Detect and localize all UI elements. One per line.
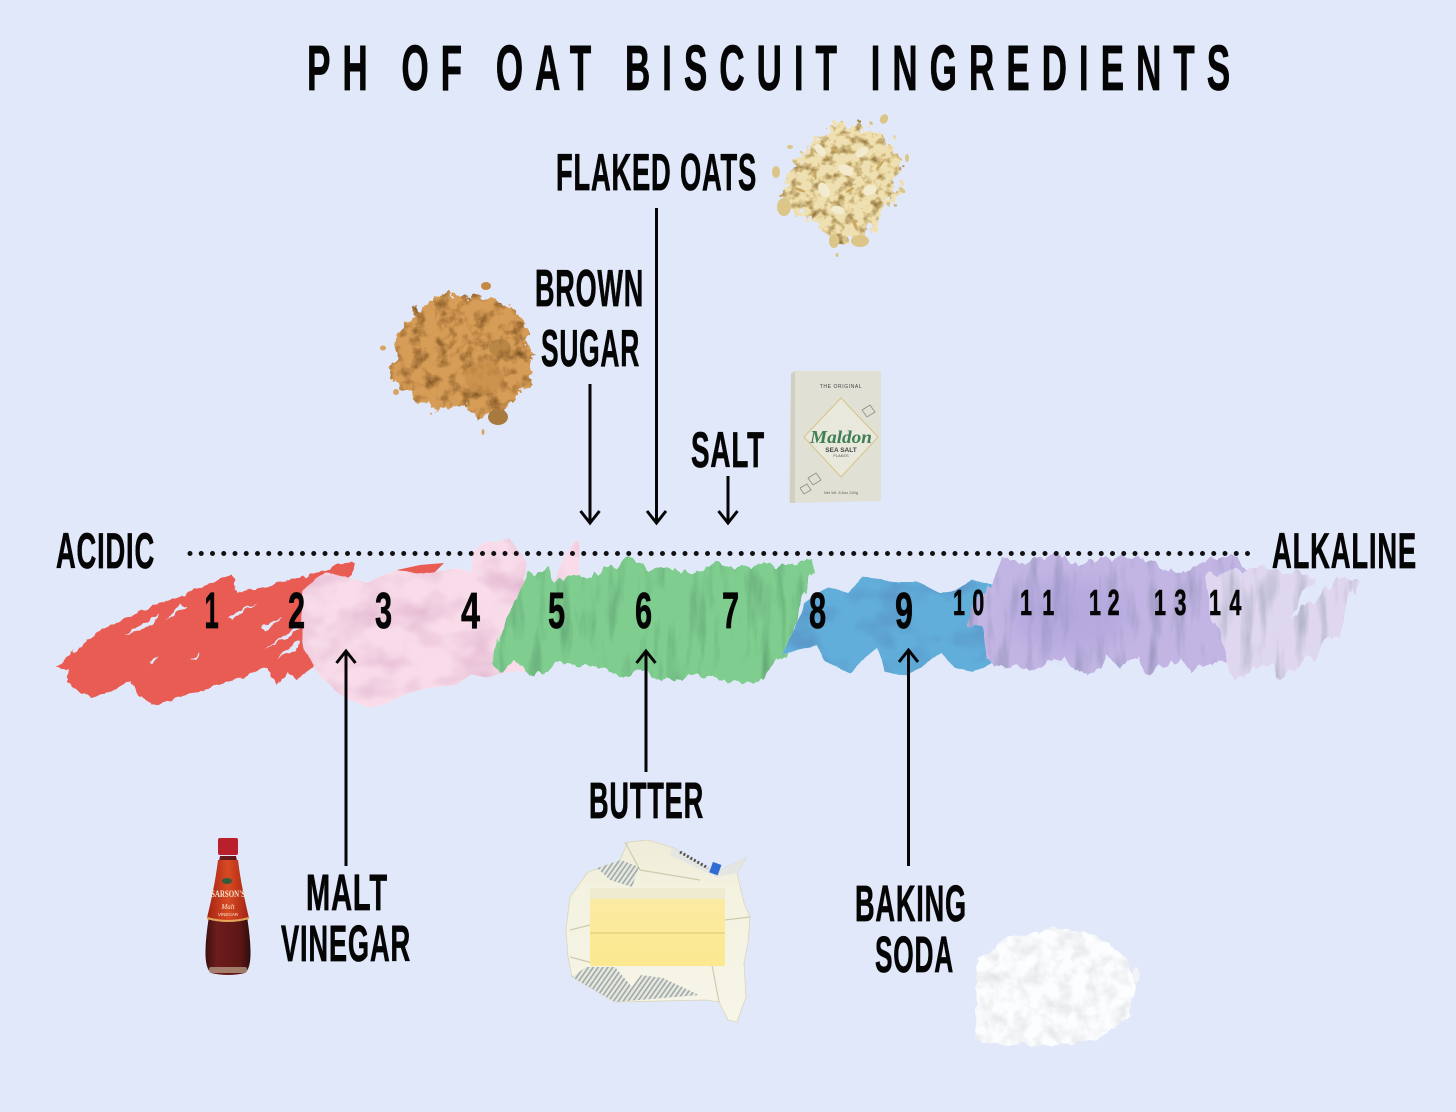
wrapper — [566, 840, 750, 1022]
icon: malt vinegar bottle — [205, 838, 251, 975]
scale numbers 1 to 9: 7 — [722, 582, 740, 639]
scale numbers 1 to 9: 9 — [895, 582, 914, 639]
scale numbers 1 to 9: 2 — [288, 582, 306, 639]
icon: brown sugar pile — [380, 282, 534, 435]
icon: maldon sea salt box — [789, 371, 881, 503]
butter block — [590, 899, 725, 966]
scale numbers 10 to 14: 14 — [1209, 583, 1242, 623]
icon: maldon sea salt box: FLAKES — [833, 453, 849, 458]
scale numbers 1 to 9: 5 — [548, 582, 566, 639]
red stroke: small fragment — [397, 563, 444, 588]
label: malt vinegar — [281, 864, 411, 972]
icon: butter on wrapper — [566, 840, 750, 1022]
arrow: flaked oats to pH 6 — [647, 208, 666, 523]
scale numbers 10 to 14: 10 — [953, 583, 984, 623]
label: acidic: ACIDIC — [56, 523, 155, 579]
arrow: malt vinegar to pH 3 — [336, 651, 356, 866]
icon: maldon sea salt box: SEA SALT — [825, 447, 857, 454]
scale numbers 10 to 14: 13 — [1154, 583, 1186, 623]
arrow: butter to pH 6 — [636, 651, 656, 772]
wrapper crease lines — [570, 842, 750, 1002]
icon: flaked oats pile — [772, 113, 909, 257]
wrapper print strip — [670, 848, 746, 877]
scale numbers 1 to 9: 3 — [375, 582, 393, 639]
wrapper striped fold bottom — [572, 967, 699, 1002]
label: baking soda: BAKING — [855, 875, 967, 932]
pink stroke: acidic — [299, 540, 580, 708]
label: salt: SALT — [691, 422, 765, 478]
label: baking soda: SODA — [875, 926, 954, 983]
pale purple stroke end — [1206, 568, 1358, 685]
label: butter: BUTTER — [589, 772, 704, 829]
scale numbers 1 to 9: 8 — [809, 582, 827, 639]
scale numbers 1 to 9 — [204, 582, 914, 639]
icon: malt vinegar bottle: SARSON'S — [211, 889, 245, 899]
label: brown sugar — [535, 260, 644, 378]
label: malt vinegar: MALT — [306, 864, 388, 921]
scale numbers 1 to 9: 1 — [204, 582, 220, 639]
purple stroke darker wash — [1010, 579, 1130, 651]
arrow: brown sugar to pH 5 — [580, 384, 600, 523]
purple stroke: strongly alkaline — [968, 553, 1314, 685]
icon: baking soda pile — [976, 926, 1140, 1046]
scale numbers 10 to 14 — [953, 583, 1242, 623]
wrapper striped fold top — [597, 860, 639, 887]
arrow: baking soda to pH 9 — [899, 650, 918, 866]
pH scale: coloured brush strokes with numbers — [56, 540, 1358, 708]
scale numbers 10 to 14: 11 — [1020, 583, 1054, 623]
arrow: salt to pH 7 — [718, 476, 738, 523]
wrapper inner shadow — [590, 888, 725, 899]
scale numbers 1 to 9: 6 — [635, 582, 653, 639]
label: malt vinegar: VINEGAR — [281, 915, 411, 972]
icon: malt vinegar bottle: VINEGAR — [218, 912, 239, 917]
dotted scale line — [190, 551, 1248, 556]
icon: maldon sea salt box: Net Wt. 8.5oz 240g — [824, 490, 858, 495]
scale numbers 1 to 9: 4 — [461, 582, 481, 639]
green stroke: near neutral — [489, 557, 814, 685]
label: brown sugar: SUGAR — [541, 320, 640, 378]
icon: maldon sea salt box: Maldon — [809, 427, 872, 447]
scale numbers 10 to 14: 12 — [1089, 583, 1120, 623]
blue stroke: alkaline — [782, 577, 1000, 675]
label: flaked oats: FLAKED OATS — [556, 144, 757, 202]
label: baking soda — [855, 875, 967, 983]
title: PH OF OAT BISCUIT INGREDIENTS — [307, 32, 1231, 104]
label: brown sugar: BROWN — [535, 260, 644, 318]
red stroke: strongly acidic — [56, 562, 355, 706]
icon: maldon sea salt box: THE ORIGINAL — [820, 384, 862, 390]
icon: malt vinegar bottle: Malt — [220, 903, 236, 911]
